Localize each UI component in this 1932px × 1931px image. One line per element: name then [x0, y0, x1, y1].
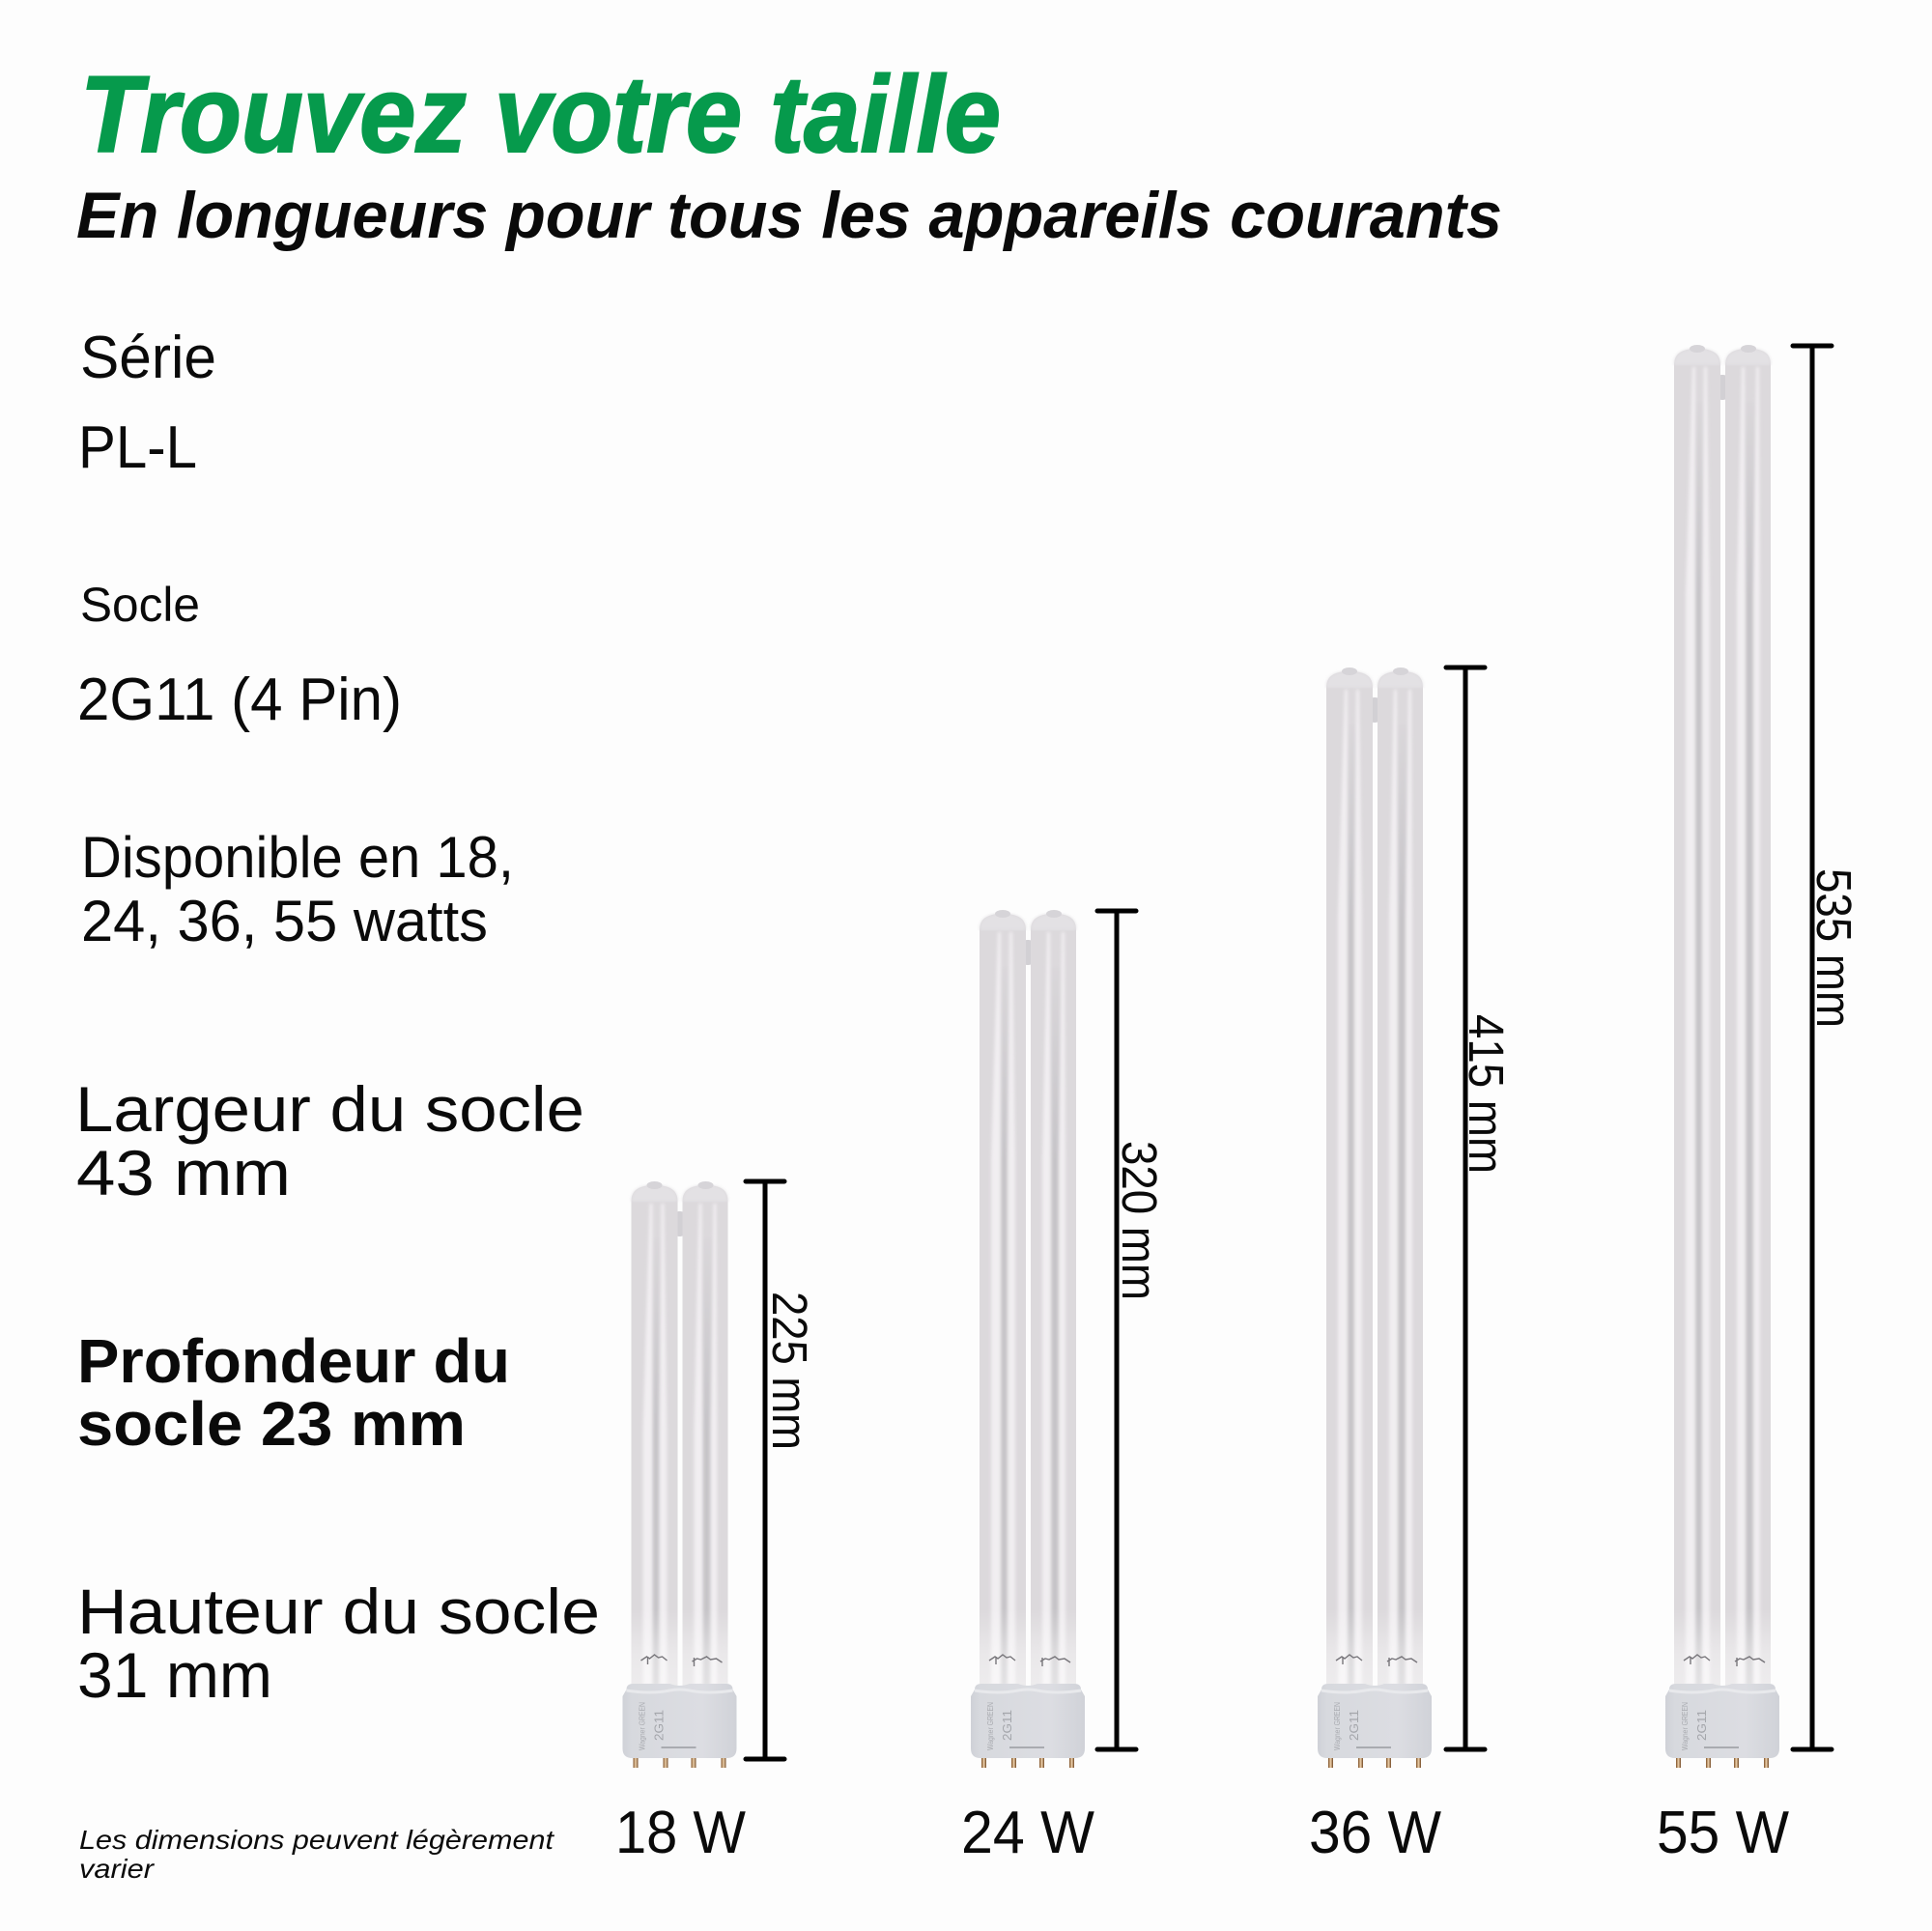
wattage label: 24 W: 24 W [961, 1800, 1094, 1866]
spec: série value: PL-L [78, 414, 197, 481]
lamp: 55 W: Wagner GREEN [1681, 1702, 1690, 1750]
lamp: 55 W: 2G11 [1694, 1710, 1709, 1741]
spec: base width: Largeur du socle [75, 1073, 584, 1145]
title: Trouvez votre taille [80, 54, 1001, 175]
spec: socle value: 2G11 (4 Pin) [77, 667, 402, 733]
footnote: varier [79, 1854, 156, 1884]
dimension line: 225 mm: 225 mm [762, 1292, 817, 1450]
wattage label: 18 W: 18 W [615, 1800, 746, 1866]
spec: base height [77, 1576, 600, 1711]
spec: base depth: Profondeur du [77, 1326, 510, 1396]
spec: available wattages: Disponible en 18, [81, 825, 514, 890]
dimension line: 415 mm [1446, 667, 1514, 1749]
spec: série label: Série [80, 325, 216, 391]
lamp: 18 W: 2G11 [651, 1710, 667, 1741]
lamp: 36 W: 2G11 [1347, 1710, 1361, 1741]
lamp: 36 W: Wagner GREEN [1333, 1702, 1342, 1750]
spec: base width: 43 mm [76, 1137, 291, 1208]
spec: base depth [77, 1326, 510, 1459]
dimension line: 535 mm [1793, 346, 1861, 1749]
spec: socle label: Socle [80, 578, 200, 632]
dimension line: 320 mm: 320 mm [1112, 1141, 1167, 1300]
footnote [79, 1825, 554, 1884]
wattage label: 36 W: 36 W [1309, 1800, 1441, 1866]
spec: base width [75, 1073, 584, 1208]
lamp: 36 W [1318, 667, 1432, 1768]
lamp: 24 W [971, 910, 1085, 1768]
wattage label: 55 W: 55 W [1657, 1800, 1789, 1866]
spec: base height: 31 mm [77, 1639, 272, 1711]
dimension line: 225 mm [746, 1181, 817, 1759]
lamp: 24 W: 2G11 [1000, 1710, 1014, 1741]
subtitle: En longueurs pour tous les appareils courants [76, 179, 1502, 252]
lamp: 18 W: Wagner GREEN [638, 1702, 647, 1750]
spec: base depth: socle 23 mm [77, 1389, 466, 1459]
lamp: 24 W: Wagner GREEN [986, 1702, 995, 1750]
spec: available wattages: 24, 36, 55 watts [81, 889, 488, 953]
lamp: 55 W [1665, 345, 1779, 1768]
spec: available wattages [81, 825, 514, 953]
footnote: Les dimensions peuvent légèrement [79, 1825, 554, 1855]
dimension line: 535 mm: 535 mm [1806, 868, 1861, 1028]
dimension line: 320 mm [1097, 911, 1167, 1749]
dimension line: 415 mm: 415 mm [1459, 1014, 1514, 1174]
spec: base height: Hauteur du socle [77, 1576, 600, 1647]
lamp: 18 W [622, 1181, 736, 1768]
